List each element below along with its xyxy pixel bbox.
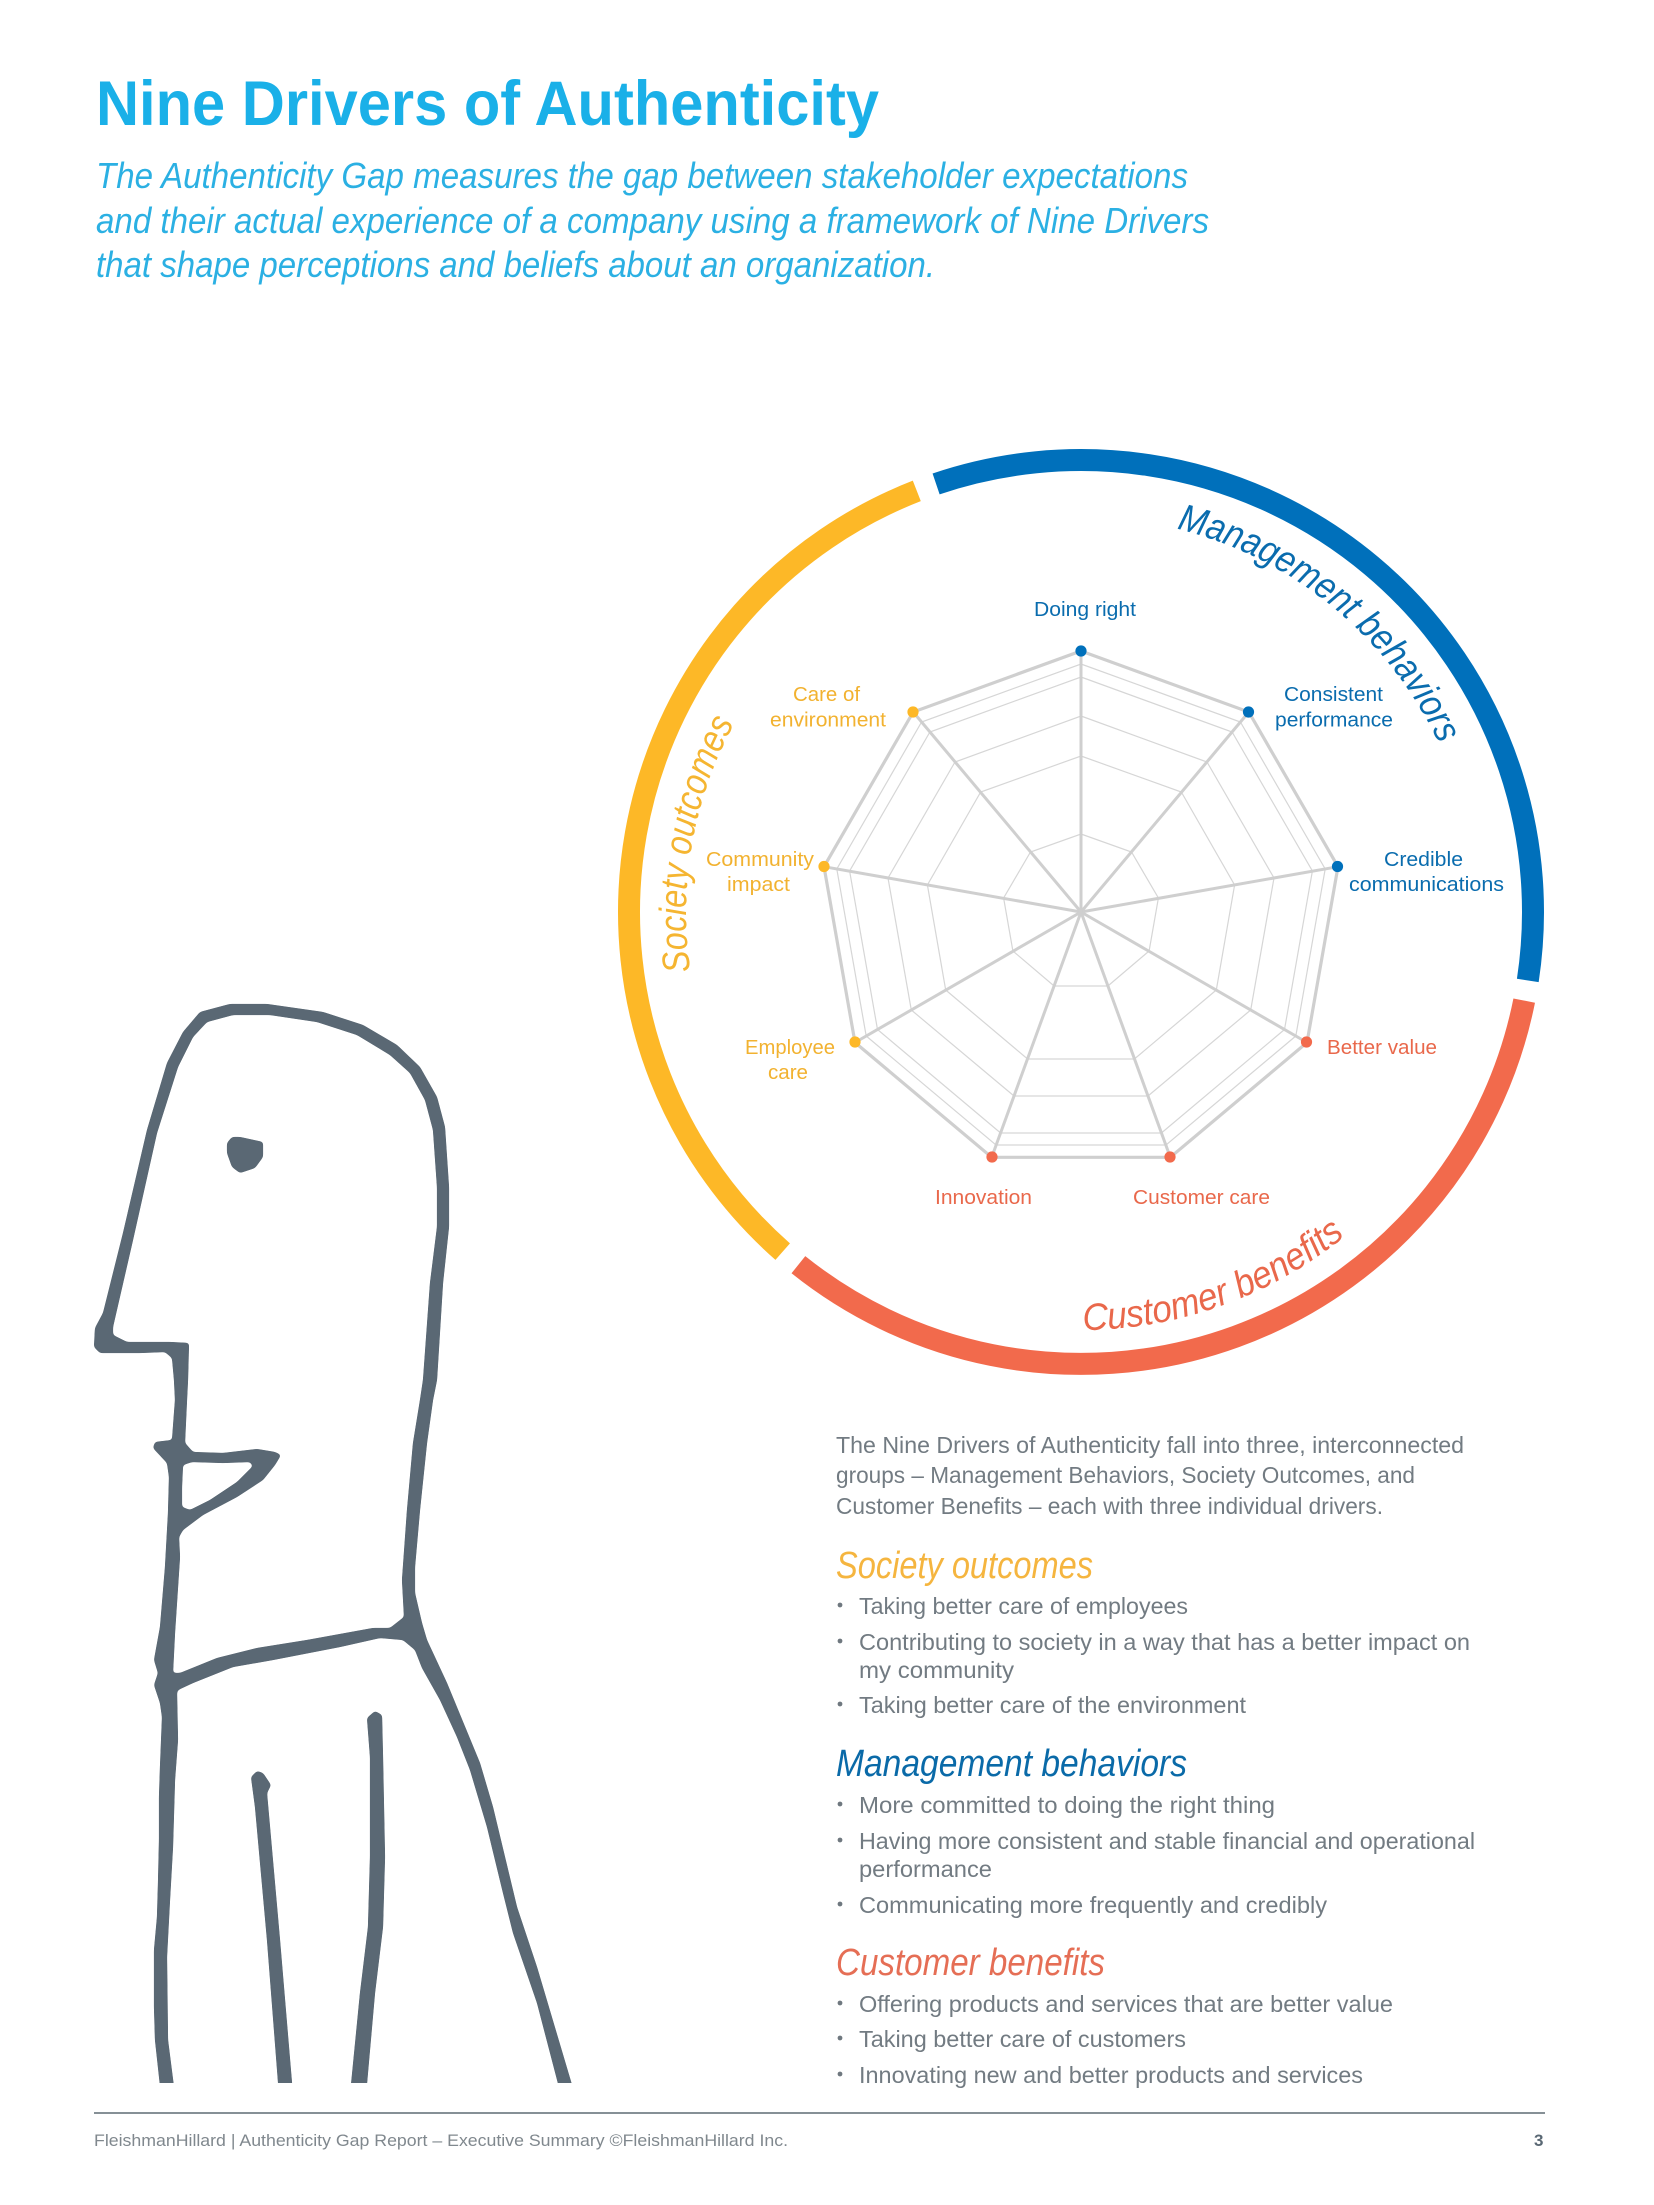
outer ring: management behaviors arc	[936, 460, 1533, 980]
driver labels: Care of	[793, 683, 860, 706]
intro paragraph: groups – Management Behaviors, Society Outcomes, and	[836, 1462, 1415, 1488]
section: management behaviors	[836, 1743, 1475, 1918]
driver labels: Customer care	[1133, 1186, 1270, 1209]
intro paragraph	[836, 1432, 1464, 1519]
title: Nine Drivers of Authenticity	[96, 69, 879, 139]
arm line right	[350, 1711, 385, 2095]
driver labels: communications	[1349, 873, 1504, 896]
list: society outcomes: Taking better care of the environment	[859, 1692, 1246, 1718]
page number: 3	[1534, 2131, 1543, 2150]
heading: society outcomes: Society outcomes	[836, 1545, 1093, 1587]
arm line left	[251, 1771, 293, 2095]
driver labels: environment	[770, 708, 886, 732]
list: management behaviors: Communicating more frequently and credibly	[859, 1892, 1327, 1918]
intro paragraph: The Nine Drivers of Authenticity fall into three, interconnected	[836, 1432, 1464, 1458]
driver labels: care	[768, 1061, 808, 1084]
radar outline	[824, 651, 1338, 1157]
driver labels: Community	[706, 848, 815, 871]
intro paragraph: Customer Benefits – each with three individual drivers.	[836, 1493, 1383, 1519]
list: customer benefits: Offering products and services that are better value	[859, 1991, 1393, 2017]
outer ring: society outcomes arc	[629, 491, 917, 1252]
footer text: FleishmanHillard | Authenticity Gap Report – Executive Summary ©FleishmanHillard Inc.	[94, 2131, 788, 2150]
section: society outcomes	[836, 1545, 1470, 1718]
heading: management behaviors: Management behaviors	[836, 1743, 1187, 1785]
driver labels: performance	[1275, 708, 1393, 732]
eye	[227, 1137, 263, 1173]
radar spokes	[824, 651, 1338, 1157]
driver labels: Better value	[1327, 1036, 1437, 1059]
list: management behaviors: More committed to doing the right thing	[859, 1792, 1275, 1818]
list: customer benefits	[838, 1991, 1393, 2088]
outer ring: customer benefits arc	[798, 1001, 1524, 1364]
driver labels: Doing right	[1034, 598, 1136, 621]
heading: customer benefits: Customer benefits	[836, 1942, 1105, 1984]
list: society outcomes: Contributing to society in a way that has a better impact on	[859, 1629, 1470, 1655]
list: customer benefits: Innovating new and better products and services	[859, 2062, 1363, 2088]
list: society outcomes: Taking better care of employees	[859, 1593, 1188, 1619]
radar web rings	[837, 664, 1325, 1145]
subtitle	[96, 155, 1209, 285]
panel: radar diagram	[618, 449, 1544, 1375]
driver labels: Innovation	[935, 1186, 1032, 1209]
driver labels: Employee	[745, 1036, 835, 1059]
driver labels	[706, 598, 1504, 1209]
list: management behaviors: Having more consistent and stable financial and operational	[859, 1828, 1475, 1854]
driver labels: Consistent	[1284, 683, 1383, 706]
list: customer benefits: Taking better care of customers	[859, 2026, 1186, 2052]
curved label: society outcomes: Society outcomes	[658, 716, 732, 971]
curved label: management behaviors: Management behaviors	[1178, 504, 1456, 740]
driver labels: impact	[727, 873, 790, 896]
list: society outcomes	[838, 1593, 1470, 1718]
section: customer benefits	[836, 1942, 1393, 2088]
illustration: person in profile	[94, 1004, 575, 2095]
driver dots	[818, 645, 1343, 1163]
subtitle: that shape perceptions and beliefs about an organization.	[96, 244, 935, 285]
list: management behaviors: performance	[859, 1856, 992, 1882]
subtitle: and their actual experience of a company using a framework of Nine Drivers	[96, 200, 1209, 241]
head and body outline	[94, 1004, 575, 2095]
driver labels: Credible	[1384, 848, 1463, 871]
list: society outcomes: my community	[859, 1657, 1014, 1683]
subtitle: The Authenticity Gap measures the gap between stakeholder expectations	[96, 155, 1188, 196]
curved label: customer benefits: Customer benefits	[1084, 1222, 1342, 1330]
list: management behaviors	[838, 1792, 1475, 1918]
